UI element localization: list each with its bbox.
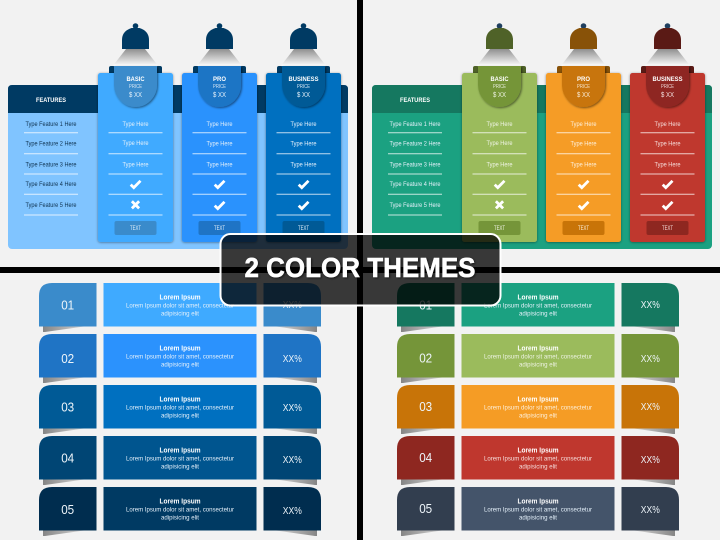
features column: Type Feature 5 Here — [26, 202, 77, 209]
card: pro orange: $ XX — [577, 92, 590, 99]
card: business: PRICE — [297, 84, 311, 90]
card: basic: Type Here — [122, 162, 149, 168]
row 05 slate: Lorem Ipsum — [518, 498, 558, 505]
row 04 red: Lorem Ipsum dolor sit amet, consectetur — [484, 456, 593, 463]
row 01 teal: XX% — [641, 299, 660, 311]
row 03: Lorem Ipsum — [160, 396, 200, 403]
card: pro: $ XX — [213, 92, 226, 99]
card: business: BUSINESS — [289, 76, 319, 83]
card: business red: Type Here — [654, 162, 681, 168]
features column: FEATURES — [36, 97, 67, 104]
row 02 green: XX% — [641, 353, 660, 365]
row 03 orange: XX% — [641, 401, 660, 413]
row 05 slate: adipisicing elit — [519, 515, 557, 522]
card: pro: PRO — [213, 76, 226, 83]
card: pro: PRICE — [213, 84, 227, 90]
features column: Type Feature 3 Here — [390, 162, 441, 168]
row 01: Lorem Ipsum dolor sit amet, consectetur — [126, 303, 235, 310]
row 04 red — [397, 436, 679, 485]
panel: blue list — [39, 283, 321, 536]
row 04 red: adipisicing elit — [519, 464, 557, 471]
row 01: Lorem Ipsum — [160, 294, 200, 301]
features column: Type Feature 4 Here — [26, 181, 77, 188]
card: basic: Type Here — [122, 140, 149, 147]
row 02 green: 02 — [419, 352, 432, 366]
card: basic green: BASIC — [490, 76, 509, 83]
features column: Type Feature 2 Here — [26, 140, 77, 148]
row 03 orange — [397, 385, 679, 434]
panel: multicolor pricing table — [372, 23, 712, 249]
row 05 slate: Lorem Ipsum dolor sit amet, consectetur — [484, 507, 593, 514]
row 01: XX% — [283, 299, 302, 311]
card: pro — [182, 23, 257, 242]
row 02 green: Lorem Ipsum dolor sit amet, consectetur — [484, 354, 593, 361]
row 04 red: XX% — [641, 454, 660, 466]
features column — [388, 97, 442, 215]
card: basic green: TEXT — [494, 225, 505, 232]
card: basic green — [462, 23, 537, 242]
card: pro: TEXT — [214, 225, 225, 232]
card: pro orange: Type Here — [570, 140, 597, 148]
row 03 orange: Lorem Ipsum dolor sit amet, consectetur — [484, 405, 593, 412]
card: business red: PRICE — [661, 84, 675, 90]
row 03: adipisicing elit — [161, 413, 199, 420]
features column: Type Feature 2 Here — [390, 140, 441, 148]
row 03: 03 — [61, 400, 74, 414]
row 01: 01 — [61, 298, 74, 312]
row 02: Lorem Ipsum — [160, 345, 200, 352]
banner: 2 color themes: 2 COLOR THEMES — [244, 252, 476, 283]
row 04: 04 — [61, 452, 74, 466]
row 05 slate: XX% — [641, 504, 660, 516]
card: business: TEXT — [298, 225, 309, 232]
card: business red: Type Here — [654, 140, 681, 148]
card: pro orange — [546, 23, 621, 242]
features column: Type Feature 1 Here — [26, 121, 77, 128]
card: basic green: $ XX — [493, 92, 506, 99]
card: basic green: PRICE — [493, 84, 507, 90]
row 01 teal: adipisicing elit — [519, 311, 557, 318]
card: business red: $ XX — [661, 92, 674, 99]
row 04: Lorem Ipsum dolor sit amet, consectetur — [126, 456, 235, 463]
row 04: adipisicing elit — [161, 464, 199, 471]
row 03 orange: adipisicing elit — [519, 413, 557, 420]
card: business — [266, 23, 341, 242]
card: business red: BUSINESS — [653, 76, 683, 83]
row 01 teal: Lorem Ipsum dolor sit amet, consectetur — [484, 303, 593, 310]
row 03 — [39, 385, 321, 434]
panel: multicolor list — [397, 283, 679, 536]
row 03 orange: Lorem Ipsum — [518, 396, 558, 403]
row 04 red: Lorem Ipsum — [518, 447, 558, 454]
row 04: Lorem Ipsum — [160, 447, 200, 454]
features column — [24, 97, 78, 215]
features column: Type Feature 1 Here — [390, 121, 441, 128]
row 03 orange: 03 — [419, 400, 432, 414]
banner: 2 color themes — [220, 234, 500, 306]
row 02: adipisicing elit — [161, 362, 199, 369]
card: basic: $ XX — [129, 92, 142, 99]
features column: FEATURES — [400, 97, 431, 104]
row 05: Lorem Ipsum — [160, 498, 200, 505]
row 01 teal: 01 — [419, 298, 432, 312]
row 02 green — [397, 334, 679, 383]
features column: Type Feature 5 Here — [390, 202, 441, 209]
row 05 — [39, 487, 321, 536]
card: pro: Type Here — [206, 162, 233, 168]
features column: Type Feature 4 Here — [390, 181, 441, 188]
row 04: XX% — [283, 454, 302, 466]
card: business red — [630, 23, 705, 242]
row 02: Lorem Ipsum dolor sit amet, consectetur — [126, 354, 235, 361]
row 02: XX% — [283, 353, 302, 365]
card: business: Type Here — [290, 140, 317, 148]
features column: Type Feature 3 Here — [26, 162, 77, 168]
row 02 green: Lorem Ipsum — [518, 345, 558, 352]
row 03: XX% — [283, 402, 302, 414]
row 02 green: adipisicing elit — [519, 362, 557, 369]
card: pro: Type Here — [206, 140, 233, 148]
card: basic green: Type Here — [486, 162, 513, 168]
card: basic green: Type Here — [486, 121, 513, 128]
card: business: $ XX — [297, 92, 310, 99]
row 01 — [39, 283, 321, 332]
features table background — [372, 85, 712, 249]
row 04 — [39, 436, 321, 485]
card: pro: Type Here — [206, 121, 233, 128]
row 04 red: 04 — [419, 451, 432, 465]
card: pro orange: TEXT — [578, 225, 589, 232]
card: basic: TEXT — [130, 225, 141, 232]
card: pro orange: PRO — [577, 76, 590, 83]
card: pro orange: Type Here — [570, 162, 597, 168]
card: basic: BASIC — [126, 76, 145, 83]
row 01 teal: Lorem Ipsum — [518, 294, 558, 301]
card: basic: PRICE — [129, 84, 143, 90]
panel: blue pricing table — [8, 23, 348, 249]
row 05: Lorem Ipsum dolor sit amet, consectetur — [126, 507, 235, 514]
row 05 slate — [397, 487, 679, 536]
card: business: Type Here — [290, 162, 317, 168]
row 01: adipisicing elit — [161, 311, 199, 318]
card: basic: Type Here — [122, 121, 149, 128]
card: business red: TEXT — [662, 225, 673, 232]
row 05: adipisicing elit — [161, 515, 199, 522]
row 02: 02 — [61, 352, 74, 366]
features table background — [8, 85, 348, 249]
card: basic green: Type Here — [486, 140, 513, 147]
row 05: XX% — [283, 505, 302, 517]
card: business: Type Here — [290, 121, 317, 128]
row 01 teal — [397, 283, 679, 332]
row 03: Lorem Ipsum dolor sit amet, consectetur — [126, 405, 235, 412]
card: pro orange: Type Here — [570, 121, 597, 128]
row 02 — [39, 334, 321, 383]
row 05: 05 — [61, 503, 74, 517]
row 05 slate: 05 — [419, 502, 432, 516]
card: pro orange: PRICE — [577, 84, 591, 90]
card: business red: Type Here — [654, 121, 681, 128]
card: basic — [98, 23, 173, 242]
